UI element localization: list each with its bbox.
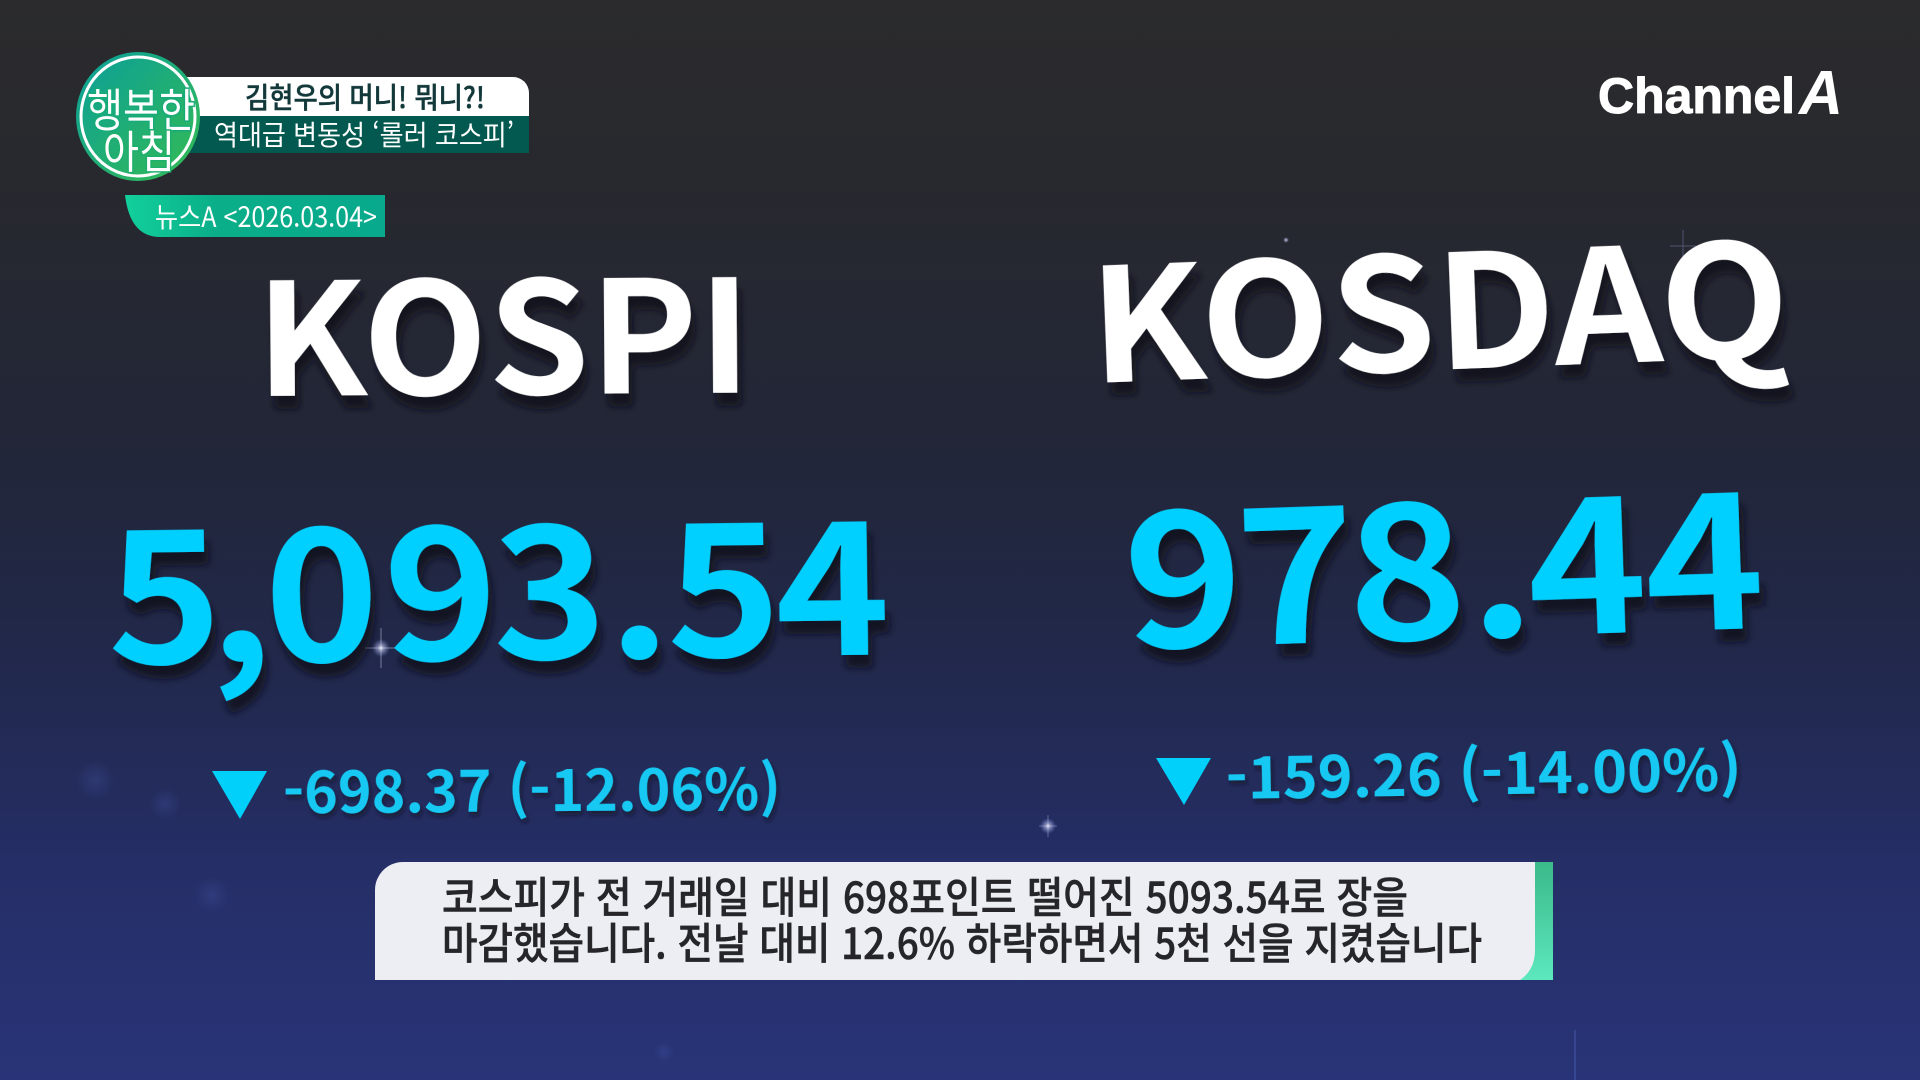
KOSDAQ heading: KOSDAQ [1085, 173, 1793, 429]
channel logo: A [1797, 59, 1843, 128]
caption accent [1520, 862, 1553, 980]
banner subtitle: 역대급 변동성 ‘롤러 코스피’ [214, 114, 514, 154]
banner title: 김현우의 머니! 뭐니?! [245, 75, 485, 117]
KOSDAQ down arrow [1156, 758, 1211, 805]
news tag: 뉴스A <2026.03.04> [155, 196, 377, 236]
logo: 행복한 아침: 행복한 [87, 75, 195, 141]
logo: 행복한 아침 [76, 52, 200, 181]
caption line 2: 마감했습니다. 전날 대비 12.6% 하락하면서 5천 선을 지켰습니다 [442, 910, 1482, 972]
KOSPI down arrow [212, 771, 267, 819]
banner top bar [180, 77, 529, 116]
banner bottom bar [180, 116, 529, 153]
caption line 1: 코스피가 전 거래일 대비 698포인트 떨어진 5093.54로 장을 [442, 864, 1408, 926]
channel logo [1598, 59, 1843, 128]
program banner [180, 75, 529, 154]
KOSDAQ change: -159.26 (-14.00%) [1225, 725, 1742, 816]
KOSPI heading: KOSPI [255, 212, 752, 441]
logo: 행복한 아침: 아침 [103, 116, 175, 181]
KOSPI change: -698.37 (-12.06%) [283, 745, 781, 830]
channel logo: Channel [1598, 68, 1795, 124]
KOSPI panel [105, 212, 891, 830]
background lights [75, 230, 1696, 1080]
KOSPI value: 5,093.54 [105, 446, 891, 716]
KOSDAQ panel [1085, 173, 1793, 816]
KOSDAQ value: 978.44 [1119, 415, 1768, 702]
caption box [375, 862, 1553, 980]
